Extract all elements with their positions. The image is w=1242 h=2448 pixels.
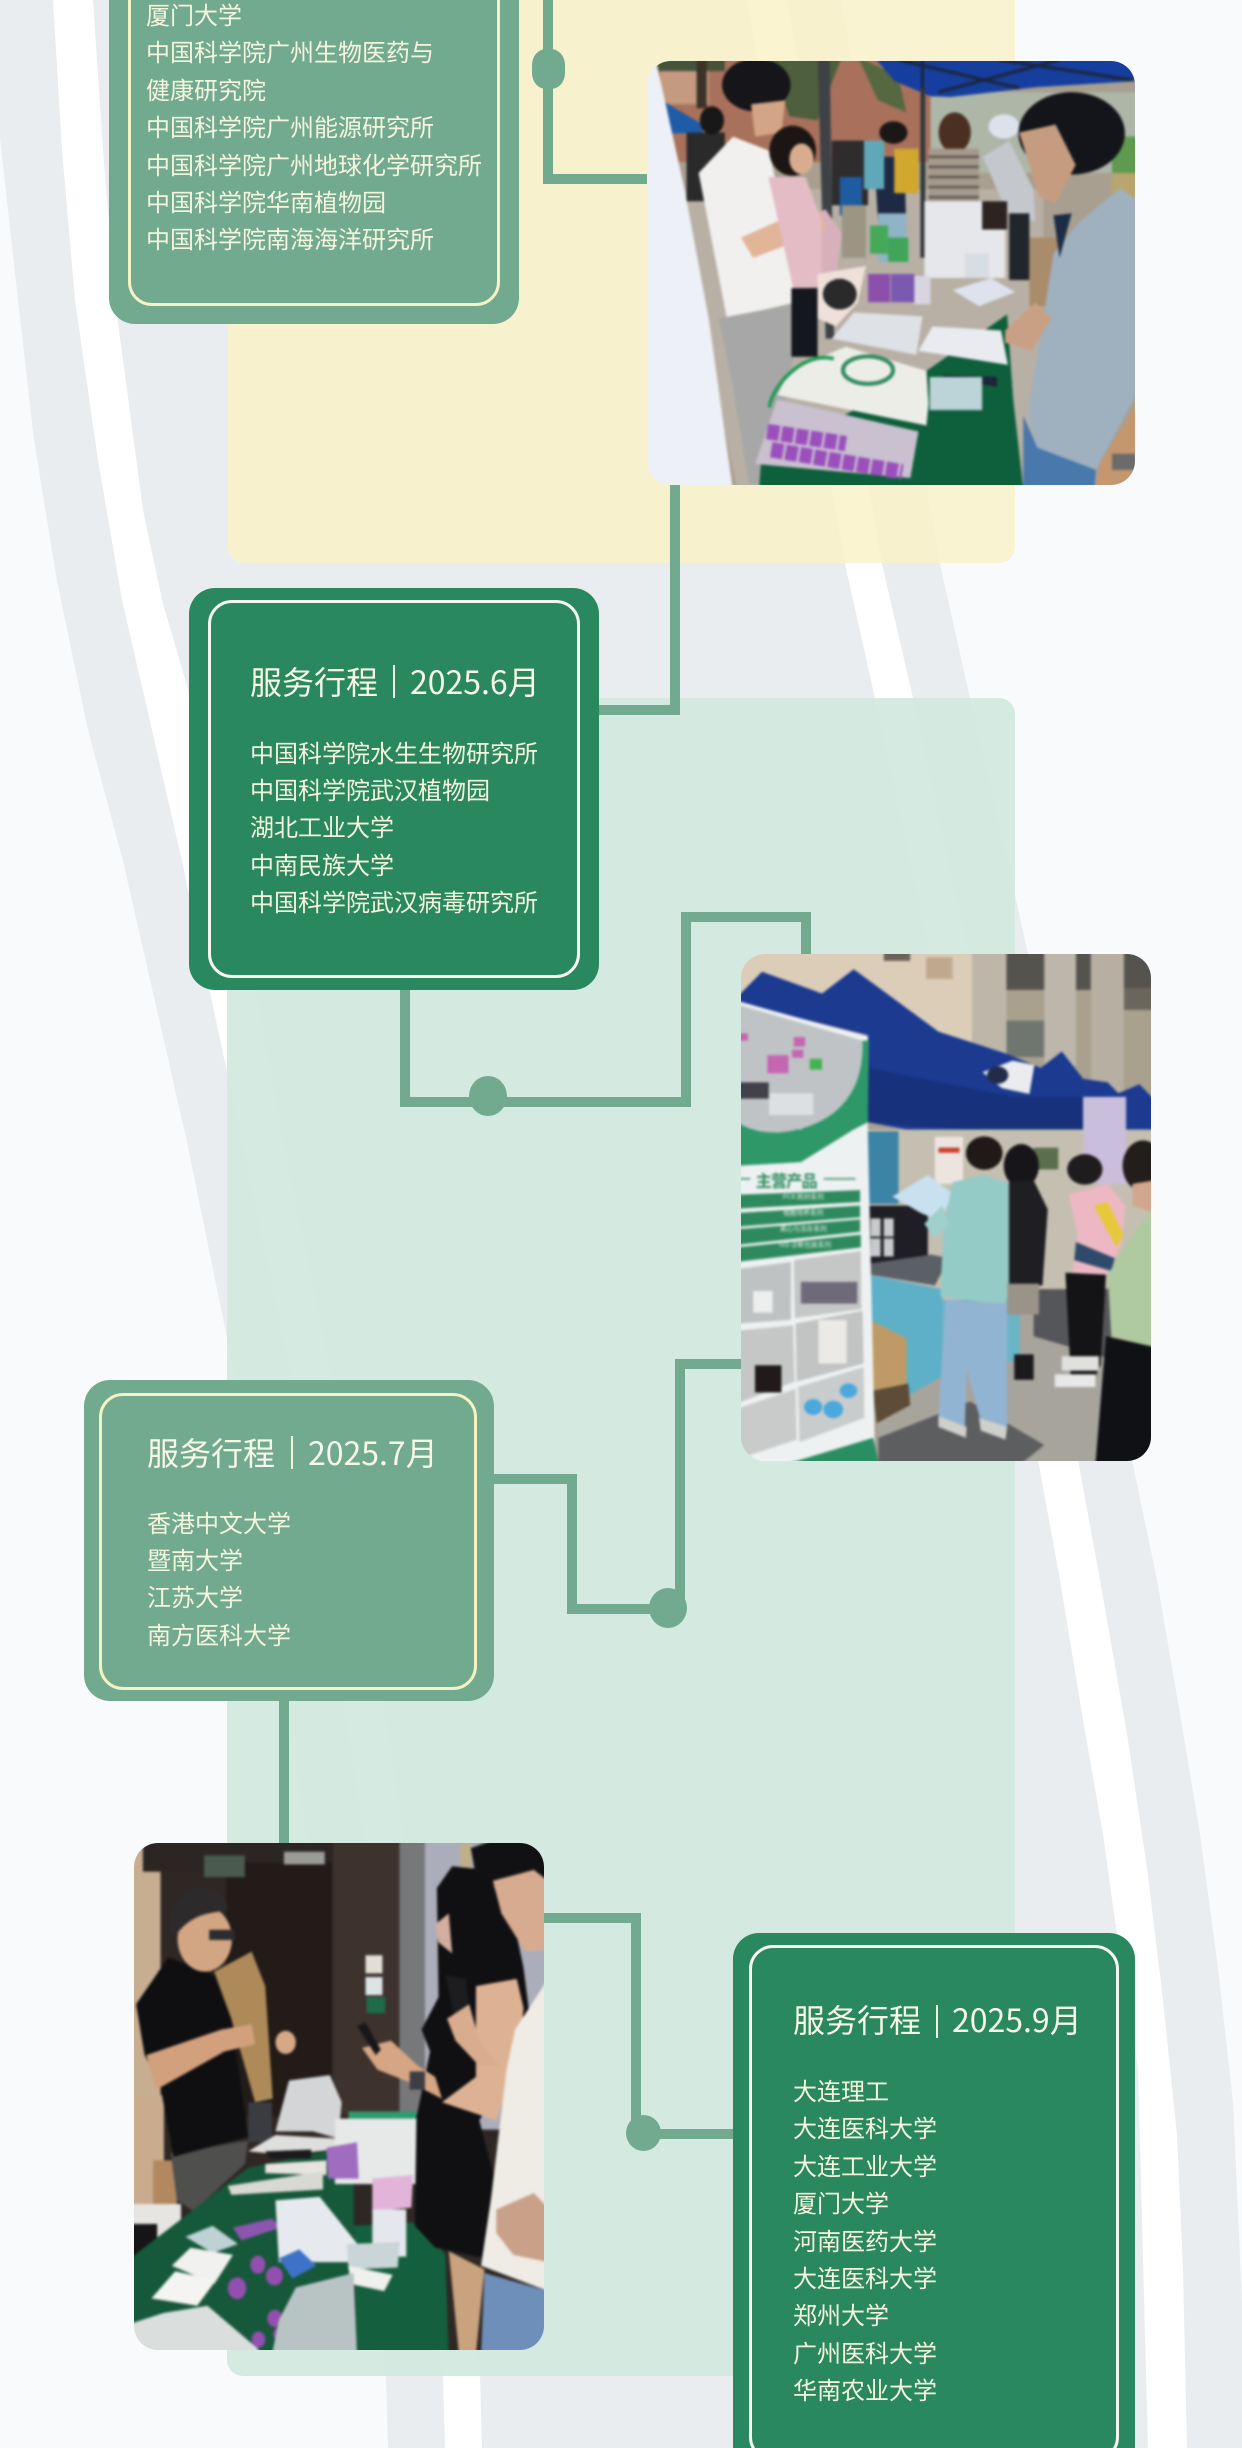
- institution list: 大连医科大学: [793, 2259, 937, 2294]
- institution list: 中国科学院广州地球化学研究所: [146, 146, 482, 181]
- card title: 服务行程: [250, 658, 378, 704]
- institution list: 中国科学院广州生物医药与: [146, 33, 434, 68]
- inner border: [128, 0, 500, 306]
- institution list: 大连工业大学: [793, 2147, 937, 2182]
- panel: yellow background block: [228, 0, 1015, 563]
- institution list: 大连理工: [793, 2072, 889, 2107]
- institution list: [793, 2072, 937, 2406]
- card date: 2025.9月: [952, 1996, 1082, 2042]
- panel: green background block: [227, 698, 1015, 2376]
- institution list: 大连医科大学: [793, 2109, 937, 2144]
- institution list: [146, 0, 482, 255]
- institution list: 江苏大学: [147, 1578, 243, 1613]
- institution list: 湖北工业大学: [250, 808, 394, 843]
- photo text: banner product series: 离心与冻存系列: [780, 1223, 827, 1233]
- institution list: 厦门大学: [793, 2184, 889, 2219]
- photo text: banner product series: 细胞培养系列: [783, 1207, 824, 1217]
- institution list: 中国科学院南海海洋研究所: [146, 220, 434, 255]
- photo: indoor booth conversation: [134, 1843, 544, 2350]
- institution list: 中南民族大学: [250, 846, 394, 881]
- institution list: 中国科学院广州能源研究所: [146, 108, 434, 143]
- card: service itinerary (top, partial): [109, 0, 519, 324]
- title separator: [291, 1436, 292, 1469]
- card title: 服务行程: [793, 1996, 921, 2042]
- institution list: [147, 1504, 291, 1651]
- institution list: 暨南大学: [147, 1541, 243, 1576]
- photo: lab consumables booth under blue canopy: [647, 61, 1135, 485]
- card title: 服务行程: [147, 1428, 275, 1474]
- institution list: 广州医科大学: [793, 2334, 937, 2369]
- inner border: [208, 600, 580, 978]
- institution list: 中国科学院武汉病毒研究所: [250, 883, 538, 918]
- photo text: banner product series: [779, 1191, 831, 1249]
- photo text: banner product series: PCR 耗材系列: [783, 1191, 824, 1201]
- card date: 2025.7月: [308, 1428, 438, 1474]
- institution list: 中国科学院武汉植物园: [250, 771, 490, 806]
- institution list: 南方医科大学: [147, 1616, 291, 1651]
- institution list: 中国科学院水生生物研究所: [250, 734, 538, 768]
- institution list: 河南医药大学: [793, 2222, 937, 2257]
- connector node dot 2: [469, 1076, 507, 1116]
- photo text: banner heading: 主营产品: [756, 1168, 818, 1192]
- photo text: banner product series: IVD 诊断包装系列: [779, 1239, 831, 1249]
- photo: booth with product roll-up banner: [741, 954, 1151, 1461]
- institution list: [250, 734, 538, 918]
- card: service itinerary 2025.9: [733, 1932, 1135, 2448]
- institution list: 健康研究院: [146, 71, 266, 106]
- institution list: 中国科学院华南植物园: [146, 183, 386, 218]
- institution list: 华南农业大学: [793, 2371, 937, 2406]
- institution list: 郑州大学: [793, 2296, 889, 2331]
- title separator: [936, 2004, 938, 2038]
- card: service itinerary 2025.6: [189, 588, 599, 990]
- connector node dot 3: [650, 1588, 687, 1628]
- card date: 2025.6月: [410, 658, 540, 704]
- connector node dot 4: [626, 2115, 660, 2151]
- inner border: [749, 1944, 1119, 2448]
- inner border: [99, 1393, 477, 1690]
- connector node dot 1: [532, 49, 565, 89]
- institution list: 香港中文大学: [147, 1504, 291, 1538]
- card: service itinerary 2025.7: [84, 1380, 494, 1701]
- title separator: [393, 665, 394, 698]
